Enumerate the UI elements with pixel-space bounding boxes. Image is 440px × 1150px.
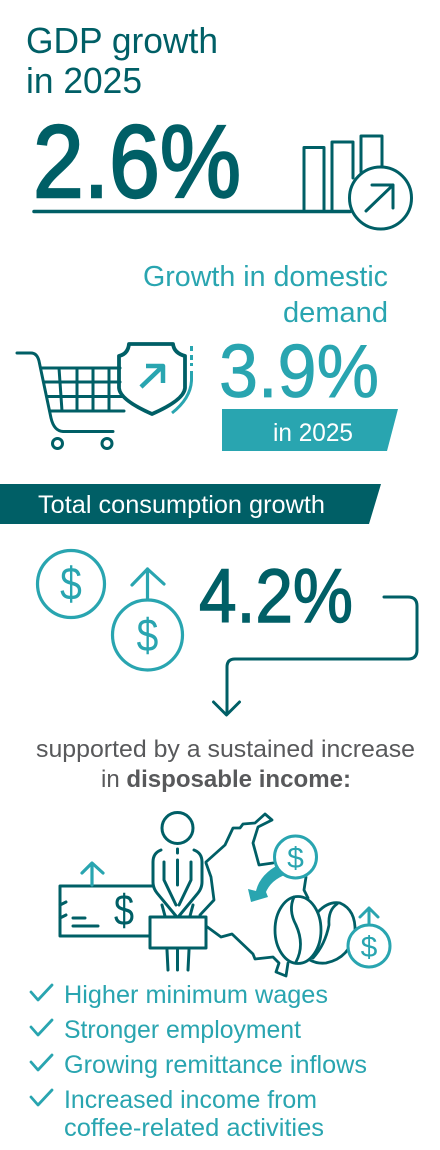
banner: Total consumption growth <box>0 484 381 524</box>
icon: banknote with up arrow: $ <box>114 887 134 935</box>
banner: in 2025: in 2025 <box>273 419 353 447</box>
list text: Higher minimum wages <box>64 981 328 1009</box>
list text: coffee-related activities <box>64 1114 324 1142</box>
icon: dollar coin <box>38 550 104 618</box>
icon: person with briefcase <box>150 812 206 970</box>
banner: in 2025 <box>222 409 398 451</box>
list text <box>64 981 367 1142</box>
icon: banknote with up arrow <box>60 863 152 936</box>
heading: Growth in domestic demand: demand <box>283 297 388 329</box>
panel: GDP growth <box>26 20 412 229</box>
panel: domestic demand <box>17 261 398 451</box>
stat: 4.2%: 4.2% <box>199 554 353 639</box>
icon: dollar coin and curved arrow <box>248 836 316 902</box>
icon: rising bars with arrow <box>34 136 412 229</box>
stat: 3.9%: 3.9% <box>219 329 379 413</box>
icon: dollar coin with up arrow: $ <box>361 931 378 964</box>
list text: Increased income from <box>64 1086 317 1114</box>
icon: dollar coin and curved arrow: $ <box>287 842 304 875</box>
icon: dollar coin with up arrow: $ <box>137 610 158 662</box>
heading: Growth in domestic demand: Growth in domestic <box>143 261 388 293</box>
icon: dollar coin with up arrow <box>112 569 182 670</box>
heading: GDP growth in 2025: GDP growth <box>26 20 218 61</box>
icon: coffee beans <box>275 896 355 964</box>
list text: Growing remittance inflows <box>64 1051 367 1079</box>
stat: 2.6%: 2.6% <box>33 104 241 219</box>
icons: check marks <box>31 985 52 1105</box>
icon: dollar coin with up arrow <box>348 908 390 967</box>
text: supporting statement: in disposable income: <box>101 766 351 793</box>
list text: Stronger employment <box>64 1016 301 1044</box>
heading: GDP growth in 2025: in 2025 <box>26 60 142 101</box>
illustration: income sources <box>60 812 390 976</box>
icon: map of Colombia <box>200 814 308 976</box>
list: income drivers <box>31 981 367 1142</box>
icon: dollar coin: $ <box>60 558 82 610</box>
arrow: connector <box>214 597 417 715</box>
banner: Total consumption growth: Total consumption growth <box>38 491 325 519</box>
heading: GDP growth in 2025 <box>26 20 218 101</box>
icon: shopping cart with shield <box>17 344 192 448</box>
text: supporting statement: supported by a sustained increase <box>36 736 415 763</box>
text: supporting statement <box>36 736 415 793</box>
panel: consumption <box>38 550 417 715</box>
heading: Growth in domestic demand <box>143 261 388 329</box>
